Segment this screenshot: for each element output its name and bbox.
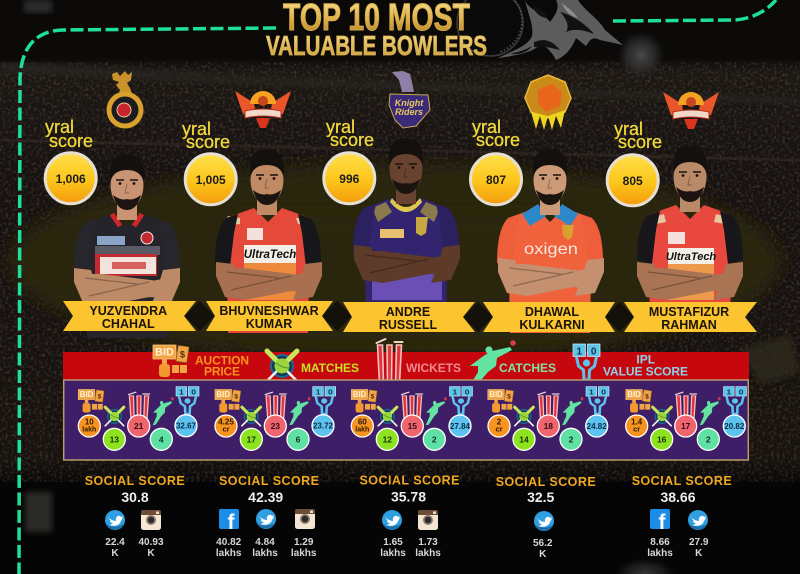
name ribbon 5: MUSTAFIZUR xyxy=(649,305,729,319)
stats: Rahman: 16 xyxy=(657,434,667,444)
yral score 4: score xyxy=(476,130,520,150)
stats: Rahman: 20.82 xyxy=(724,422,745,431)
icon: cricket ball with flame xyxy=(457,0,623,60)
player 3: Andre Russell xyxy=(353,138,460,323)
logo: Kolkata Knight Riders: Knight xyxy=(395,98,424,108)
social score 1: SOCIAL SCORE xyxy=(85,474,185,488)
social score 1: 22.4 xyxy=(105,537,125,548)
stats: Russell xyxy=(351,387,472,450)
player 2: Bhuvneshwar Kumar: UltraTech xyxy=(244,249,296,261)
yral score 2 xyxy=(182,119,236,205)
social score 3: lakhs xyxy=(415,548,441,559)
stats: Kulkarni xyxy=(488,387,609,450)
name ribbon 1: CHAHAL xyxy=(102,317,155,331)
yral score 3: yral xyxy=(326,117,355,137)
yral score 1: 1,006 xyxy=(56,172,86,186)
yral score 3 xyxy=(324,117,375,204)
legend: wickets xyxy=(376,339,461,383)
stats: Russell: 2 xyxy=(432,434,437,444)
stats: Chahal: 10 xyxy=(85,418,94,426)
social score 2: 40.82 xyxy=(216,537,242,548)
stats: Rahman xyxy=(626,387,746,450)
yral score 4: 807 xyxy=(486,173,506,187)
social score 5 xyxy=(632,474,732,559)
social score 3: 35.78 xyxy=(391,488,426,504)
legend: auction price: PRICE xyxy=(204,364,240,378)
player 4: Dhawal Kulkarni: oxigen xyxy=(524,241,578,258)
stats: Bhuvneshwar: 23 xyxy=(271,421,280,431)
legend: auction price xyxy=(153,345,249,378)
stats: Chahal: 13 xyxy=(110,434,119,444)
social score 1: 40.93 xyxy=(138,537,164,548)
dashed border: right xyxy=(613,0,776,21)
social score 3: SOCIAL SCORE xyxy=(360,474,460,488)
social score 4: 32.5 xyxy=(527,489,555,505)
player 4: Dhawal Kulkarni xyxy=(497,149,604,333)
social score 2: lakhs xyxy=(252,548,278,559)
social score 2: 42.39 xyxy=(248,489,283,505)
social score 2 xyxy=(216,474,319,559)
legend: auction price: AUCTION xyxy=(195,354,249,368)
stats: Rahman: cr xyxy=(633,424,640,434)
social score 2: 4.84 xyxy=(255,537,275,548)
yral score 5 xyxy=(607,119,662,206)
social score 2: 1.29 xyxy=(294,537,314,548)
stats: Rahman: 17 xyxy=(681,421,691,431)
name ribbon 1: YUZVENDRA xyxy=(89,304,167,318)
stats panel xyxy=(64,380,748,460)
name ribbon 4 xyxy=(483,302,615,332)
name ribbon 4: DHAWAL xyxy=(525,305,579,319)
yral score 1: score xyxy=(49,131,93,151)
social score 4: 56.2 xyxy=(533,538,553,549)
legend: wickets: WICKETS xyxy=(406,361,461,375)
stats: Bhuvneshwar xyxy=(215,387,336,450)
legend: catches: CATCHES xyxy=(499,361,556,375)
player 1: Yuzvendra Chahal xyxy=(74,154,180,338)
legend band xyxy=(63,339,749,387)
name ribbon 3: RUSSELL xyxy=(379,318,438,332)
yral score 3: 996 xyxy=(339,172,360,186)
stats: Russell: 60 xyxy=(358,418,367,426)
stats: Kulkarni: 14 xyxy=(519,434,529,444)
logo: Kolkata Knight Riders: Riders xyxy=(395,107,423,117)
yral score 4 xyxy=(470,117,522,205)
stats: Chahal xyxy=(78,387,199,450)
social score 1: 30.8 xyxy=(121,489,149,505)
social score 3 xyxy=(360,474,460,559)
name ribbon 3: ANDRE xyxy=(386,305,430,319)
yral score 5: 805 xyxy=(623,174,643,188)
legend: matches: MATCHES xyxy=(301,361,359,375)
stats: Bhuvneshwar: 6 xyxy=(296,434,301,444)
name ribbon 2 xyxy=(206,301,333,331)
social score 3: lakhs xyxy=(380,548,406,559)
social score 5: 8.66 xyxy=(650,537,670,548)
logo: Gujarat Lions xyxy=(525,75,571,130)
stats: Russell: 27.84 xyxy=(450,422,471,431)
social score 5: SOCIAL SCORE xyxy=(632,474,732,488)
legend: IPL value score xyxy=(573,344,688,380)
stats: Bhuvneshwar: 23.72 xyxy=(313,422,334,431)
stats: Kulkarni: 24.82 xyxy=(587,422,607,431)
stats: Rahman: 1.4 xyxy=(631,418,643,426)
yral score 2: yral xyxy=(182,119,211,139)
social score 5: lakhs xyxy=(647,548,673,559)
social score 2: SOCIAL SCORE xyxy=(219,474,319,488)
social score 5: K xyxy=(695,548,703,559)
social score 1: K xyxy=(111,548,119,559)
name ribbon 5 xyxy=(624,302,757,332)
name ribbon 4: KULKARNI xyxy=(519,318,585,332)
player 5: Mustafizur Rahman: UltraTech xyxy=(666,251,716,263)
yral score 3: score xyxy=(330,130,374,150)
social score 2: lakhs xyxy=(291,548,317,559)
logo: Royal Challengers Bangalore xyxy=(106,71,144,128)
yral score 1: yral xyxy=(45,117,74,137)
stats: Chahal: 32.67 xyxy=(176,422,197,431)
stats: Kulkarni: 2 xyxy=(569,434,574,444)
name ribbon 2: BHUVNESHWAR xyxy=(219,304,319,318)
name ribbon 2: KUMAR xyxy=(246,317,292,331)
yral score 2: score xyxy=(186,132,230,152)
yral score 2: 1,005 xyxy=(196,173,226,187)
dashed border: left xyxy=(19,28,276,574)
yral score 4: yral xyxy=(472,117,501,137)
social score 3: 1.65 xyxy=(383,537,403,548)
stats: Bhuvneshwar: 17 xyxy=(247,434,256,444)
title xyxy=(266,0,487,61)
player 5: Mustafizur Rahman xyxy=(637,146,743,330)
social score 4: SOCIAL SCORE xyxy=(496,475,596,489)
stats: Russell: 12 xyxy=(383,434,392,444)
logo: Sunrisers Hyderabad xyxy=(235,91,291,128)
stats: Rahman: 2 xyxy=(706,434,711,444)
yral score 5: yral xyxy=(614,119,643,139)
stats: Chahal: lakh xyxy=(82,426,96,434)
name ribbon 5: RAHMAN xyxy=(661,318,717,332)
legend: catches xyxy=(469,340,556,387)
social score 1 xyxy=(85,474,185,559)
stats: Kulkarni: 18 xyxy=(544,421,553,431)
social score 1: K xyxy=(147,548,155,559)
social score 4 xyxy=(496,475,596,560)
social score 2: lakhs xyxy=(216,548,242,559)
stats: Bhuvneshwar: 4.25 xyxy=(218,418,234,426)
name ribbon 3 xyxy=(343,302,475,332)
name ribbon 1 xyxy=(63,301,196,331)
stats: Kulkarni: cr xyxy=(495,424,503,434)
yral score 5: score xyxy=(618,132,662,152)
yral score 1 xyxy=(45,117,96,204)
stats: Chahal: 4 xyxy=(159,434,164,444)
logo: Kolkata Knight Riders xyxy=(389,71,430,128)
player 2: Bhuvneshwar Kumar xyxy=(215,149,322,333)
title: VALUABLE BOWLERS xyxy=(266,30,487,61)
stats: Kulkarni: 2 xyxy=(497,418,502,426)
ribbon separators xyxy=(184,301,634,332)
stats: Russell: 15 xyxy=(408,421,417,431)
stats: Bhuvneshwar: cr xyxy=(222,424,230,434)
legend: IPL value score: IPL xyxy=(636,352,655,366)
legend: matches xyxy=(267,351,359,381)
stats: Russell: lakh xyxy=(355,426,369,434)
stats: Chahal: 21 xyxy=(134,421,144,431)
social score 5: 38.66 xyxy=(660,489,696,505)
social score 5: 27.9 xyxy=(689,537,709,548)
legend: IPL value score: VALUE SCORE xyxy=(603,364,688,378)
logo: Sunrisers Hyderabad xyxy=(663,92,719,129)
social score 3: 1.73 xyxy=(418,537,438,548)
social score 4: K xyxy=(539,549,547,560)
